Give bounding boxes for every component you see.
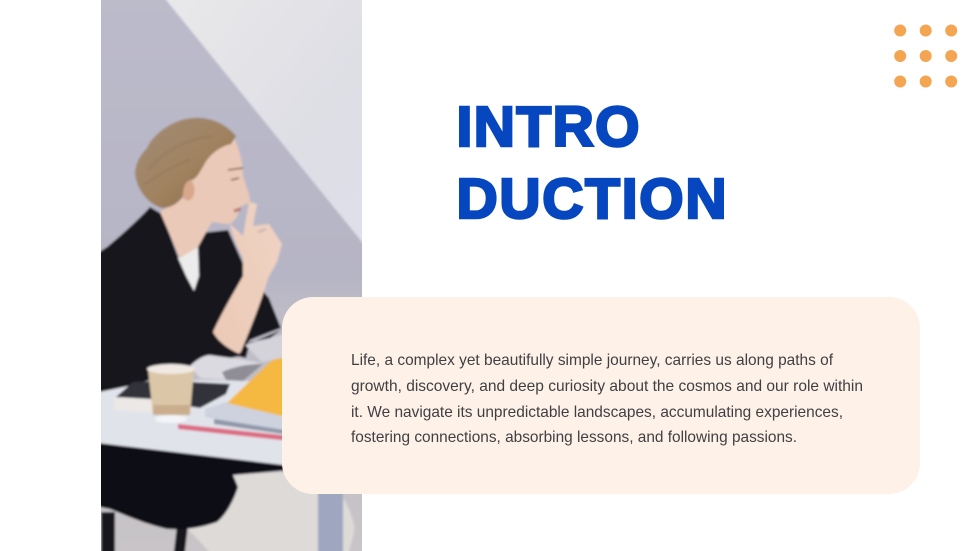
body text: Life, a complex yet beautifully simple journey, carries us along paths of xyxy=(351,352,834,369)
title: INTRO xyxy=(456,95,640,159)
jacket xyxy=(90,207,281,396)
paper cup xyxy=(147,364,195,423)
panel: introduction text card xyxy=(282,297,920,494)
hair xyxy=(135,118,236,208)
white table xyxy=(101,379,282,468)
hand and forearm xyxy=(213,202,282,354)
stack of notebooks xyxy=(205,402,282,430)
photo: woman thinking at a desk xyxy=(101,0,362,551)
body text: growth, discovery, and deep curiosity about the cosmos and our role within xyxy=(351,378,863,395)
trousers xyxy=(180,470,354,551)
body text: fostering connections, absorbing lessons, and following passions. xyxy=(351,429,797,446)
shirt xyxy=(178,247,199,291)
dark phone and glasses xyxy=(115,381,230,408)
ring xyxy=(258,229,266,232)
title: DUCTION xyxy=(456,167,726,231)
light sloped ceiling xyxy=(165,0,362,244)
lips xyxy=(234,209,241,211)
small white book xyxy=(114,397,152,413)
open book xyxy=(190,355,263,381)
wall xyxy=(101,0,362,551)
lower dark skirt xyxy=(90,441,290,529)
table leg xyxy=(317,494,344,551)
neck and face xyxy=(160,138,250,258)
body text: it. We navigate its unpredictable landscapes, accumulating experiences, xyxy=(351,404,843,421)
eye and brow xyxy=(228,168,243,180)
pink notebook edge xyxy=(178,424,290,441)
ear xyxy=(182,180,194,200)
papers xyxy=(244,335,282,362)
body text xyxy=(351,352,863,446)
chair legs xyxy=(101,512,188,551)
sleeve cuff xyxy=(237,330,281,358)
title xyxy=(456,95,726,231)
hair strands xyxy=(143,136,212,185)
decorative dot grid xyxy=(894,24,957,88)
yellow notebook xyxy=(226,356,282,418)
